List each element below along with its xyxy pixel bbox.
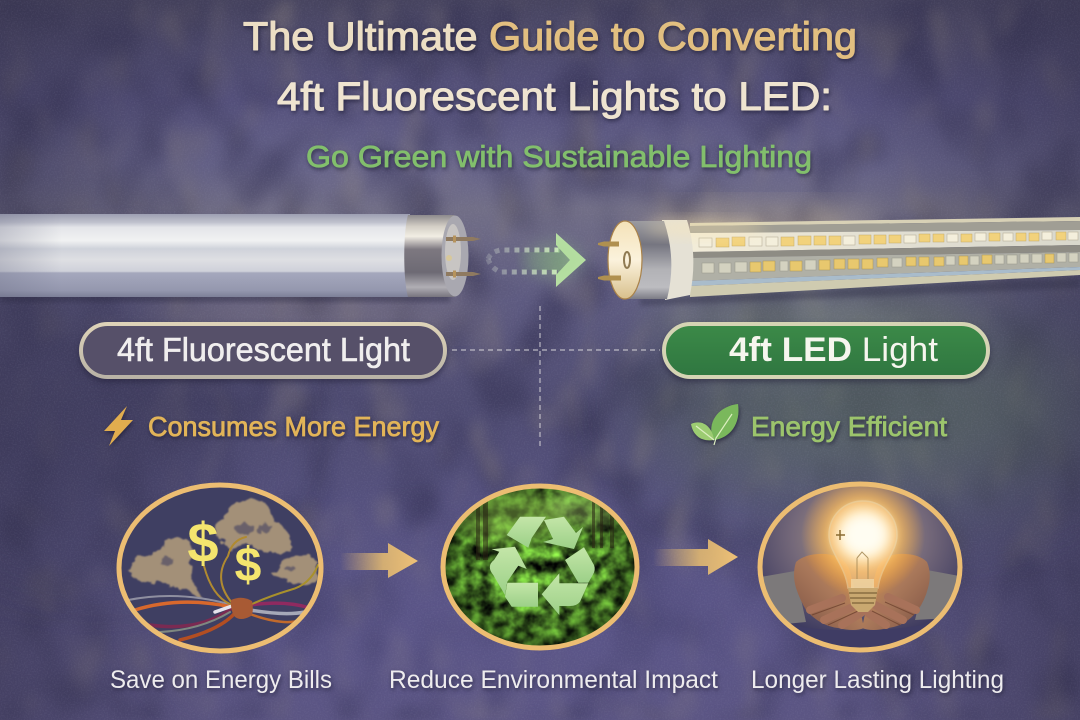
pill: LED	[664, 324, 988, 377]
arrow 2	[653, 539, 738, 575]
caption: reduce environmental impact: Reduce Environmental Impact	[389, 666, 718, 694]
cap end face	[608, 221, 642, 299]
vignette: energy bills: $	[235, 539, 262, 592]
icon: leaves	[691, 404, 738, 445]
pins	[598, 242, 619, 246]
title	[243, 15, 857, 174]
lower shadow	[847, 630, 884, 632]
metal end cap	[404, 215, 468, 297]
title line 2: 4ft Fluorescent Lights to LED:	[277, 75, 832, 119]
LED row 2	[702, 253, 1078, 273]
glow	[640, 212, 880, 252]
vignette: energy bills	[118, 484, 322, 652]
forest foliage	[441, 484, 639, 650]
lens glow	[645, 220, 765, 236]
energy efficient: Energy Efficient	[751, 411, 947, 442]
icon: recycling arrows	[490, 517, 595, 615]
bottom rail	[690, 270, 1080, 297]
tube shadow	[0, 292, 450, 302]
pins	[446, 237, 481, 241]
top rail	[690, 217, 1080, 226]
cloud shadows	[161, 521, 294, 571]
bright strip	[690, 230, 1080, 252]
pill label: 4ft Fluorescent Light	[117, 331, 410, 368]
finger creases	[812, 602, 914, 625]
bulb	[829, 501, 897, 588]
tube shadow	[640, 278, 1080, 306]
smoke clouds	[128, 500, 318, 600]
lower channel	[690, 252, 1080, 281]
sleeves	[763, 571, 806, 624]
LED row 1	[699, 232, 1078, 247]
bulb base	[848, 588, 878, 612]
caption: save on energy bills: Save on Energy Bills	[110, 666, 332, 694]
icon: lightning bolt	[104, 406, 133, 446]
fingers	[810, 597, 916, 625]
consumes more energy: Consumes More Energy	[148, 411, 439, 442]
pill label: 4ft LED Light	[729, 331, 939, 369]
conversion arrow	[488, 233, 586, 287]
right hand	[862, 554, 930, 630]
white collar	[662, 220, 693, 300]
vignette: lightbulb	[758, 482, 962, 652]
upper channel	[690, 221, 1080, 233]
LED tube	[598, 212, 1080, 306]
connector lines	[452, 306, 660, 450]
left hand	[794, 554, 864, 630]
dollar signs: $	[187, 511, 219, 574]
metal cap	[624, 221, 671, 299]
subtitle: Go Green with Sustainable Lighting	[306, 139, 812, 174]
title line 1: The Ultimate Guide to Converting	[243, 15, 857, 59]
blue reflection	[690, 267, 1080, 286]
arrow 1	[340, 543, 418, 578]
bulb glow	[804, 486, 922, 591]
fluorescent tube	[0, 214, 481, 302]
caption: longer lasting lighting: Longer Lasting Lighting	[751, 666, 1004, 694]
divider	[690, 245, 1080, 258]
wires	[128, 537, 318, 640]
tube body	[0, 214, 410, 297]
vignette: environment	[441, 484, 639, 650]
pill: fluorescent	[81, 324, 445, 377]
wire knot	[231, 598, 253, 619]
